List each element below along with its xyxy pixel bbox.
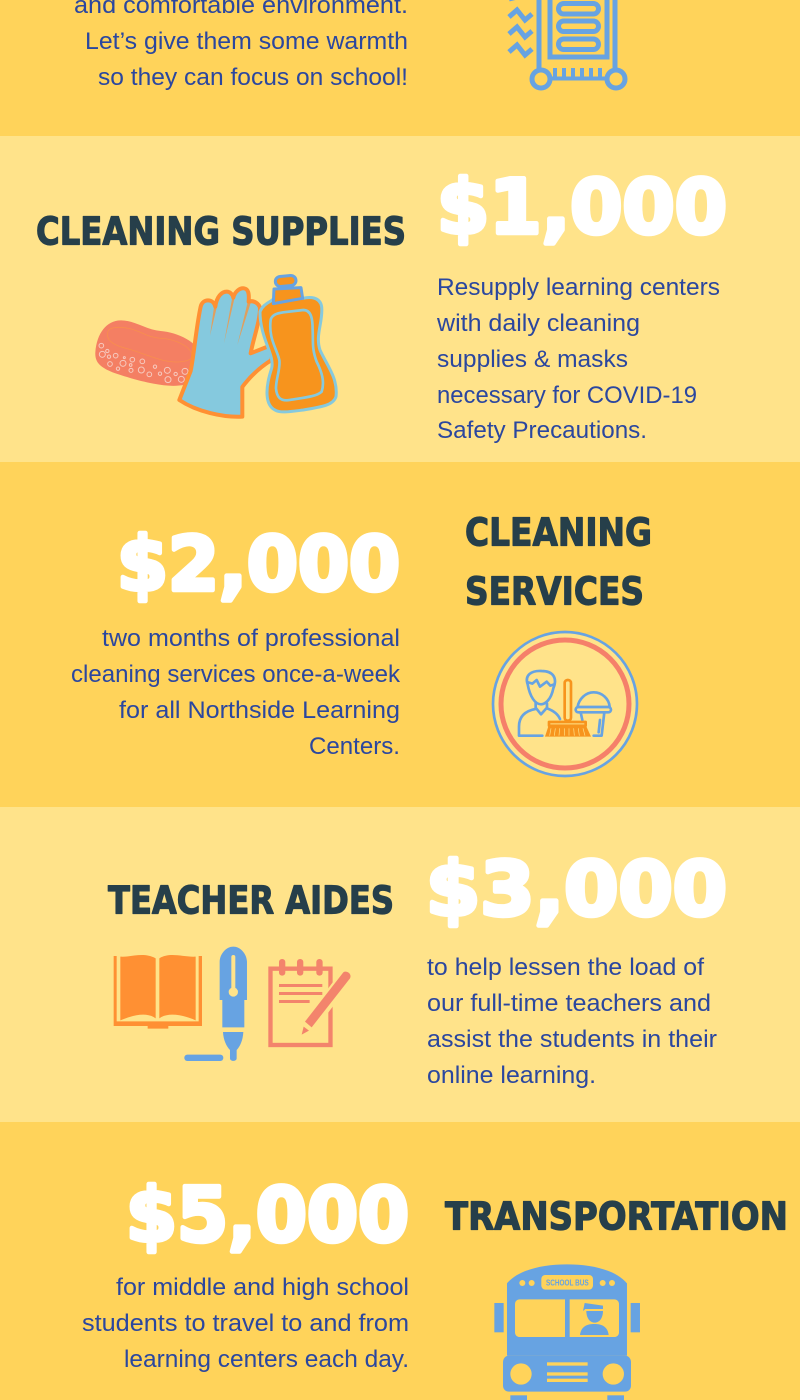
text: teacher aides description: our full-time teachers and: [427, 990, 711, 1017]
text: transportation description: [82, 1274, 409, 1373]
text: teacher aides description: to help lessen the load of: [427, 954, 704, 981]
text: cleaning supplies description: with daily cleaning: [436, 310, 640, 337]
text: transportation description: for middle and high school: [116, 1274, 409, 1301]
text: cleaning supplies description: necessary for COVID-19: [437, 382, 697, 409]
heading: cleaning services: [465, 510, 652, 614]
heading: cleaning supplies: CLEANING SUPPLIES: [36, 210, 406, 254]
icon: heater: [509, 0, 625, 88]
icon: school bus: SCHOOL BUS: [546, 1278, 589, 1288]
text: teacher aides description: online learning.: [427, 1062, 596, 1089]
text: transportation description: students to travel to and from: [82, 1310, 409, 1337]
text: cleaning services description: cleaning services once-a-week: [71, 661, 401, 688]
text: warmth description: Let’s give them some warmth: [85, 28, 408, 55]
amount: $3,000: $3,000: [426, 845, 727, 933]
text: warmth description: [74, 0, 408, 91]
text: cleaning services description: two months of professional: [102, 625, 400, 652]
heading: cleaning services: CLEANING: [465, 510, 652, 556]
heading: cleaning services: SERVICES: [465, 570, 644, 614]
text: cleaning services description: [71, 625, 401, 760]
icon: sponge, glove and bottle: [95, 275, 336, 417]
text: cleaning supplies description: Resupply learning centers: [437, 274, 720, 301]
text: teacher aides description: assist the students in their: [427, 1026, 717, 1053]
amount: $2,000: $2,000: [117, 520, 400, 608]
text: cleaning services description: Centers.: [309, 733, 400, 760]
panel: transportation: [0, 1122, 800, 1400]
panel: teacher aides: [0, 807, 800, 1122]
icon: cleaner with broom and bucket: [493, 632, 637, 776]
panel: warmth intro: [0, 0, 800, 136]
icon: book, pen and notepad: [114, 947, 351, 1061]
text: cleaning services description: for all Northside Learning: [119, 697, 400, 724]
panel: cleaning services: [0, 462, 800, 807]
amount: $1,000: $1,000: [437, 163, 727, 251]
panel: cleaning supplies: [0, 136, 800, 462]
heading: teacher aides: TEACHER AIDES: [108, 878, 394, 924]
text: warmth description: so they can focus on school!: [98, 64, 408, 91]
icon: school bus: [494, 1264, 640, 1400]
text: cleaning supplies description: [436, 274, 720, 444]
text: transportation description: learning centers each day.: [124, 1346, 409, 1373]
text: cleaning supplies description: Safety Precautions.: [437, 417, 647, 444]
text: cleaning supplies description: supplies & masks: [437, 346, 628, 373]
amount: $5,000: $5,000: [126, 1171, 409, 1259]
text: teacher aides description: [427, 954, 717, 1089]
